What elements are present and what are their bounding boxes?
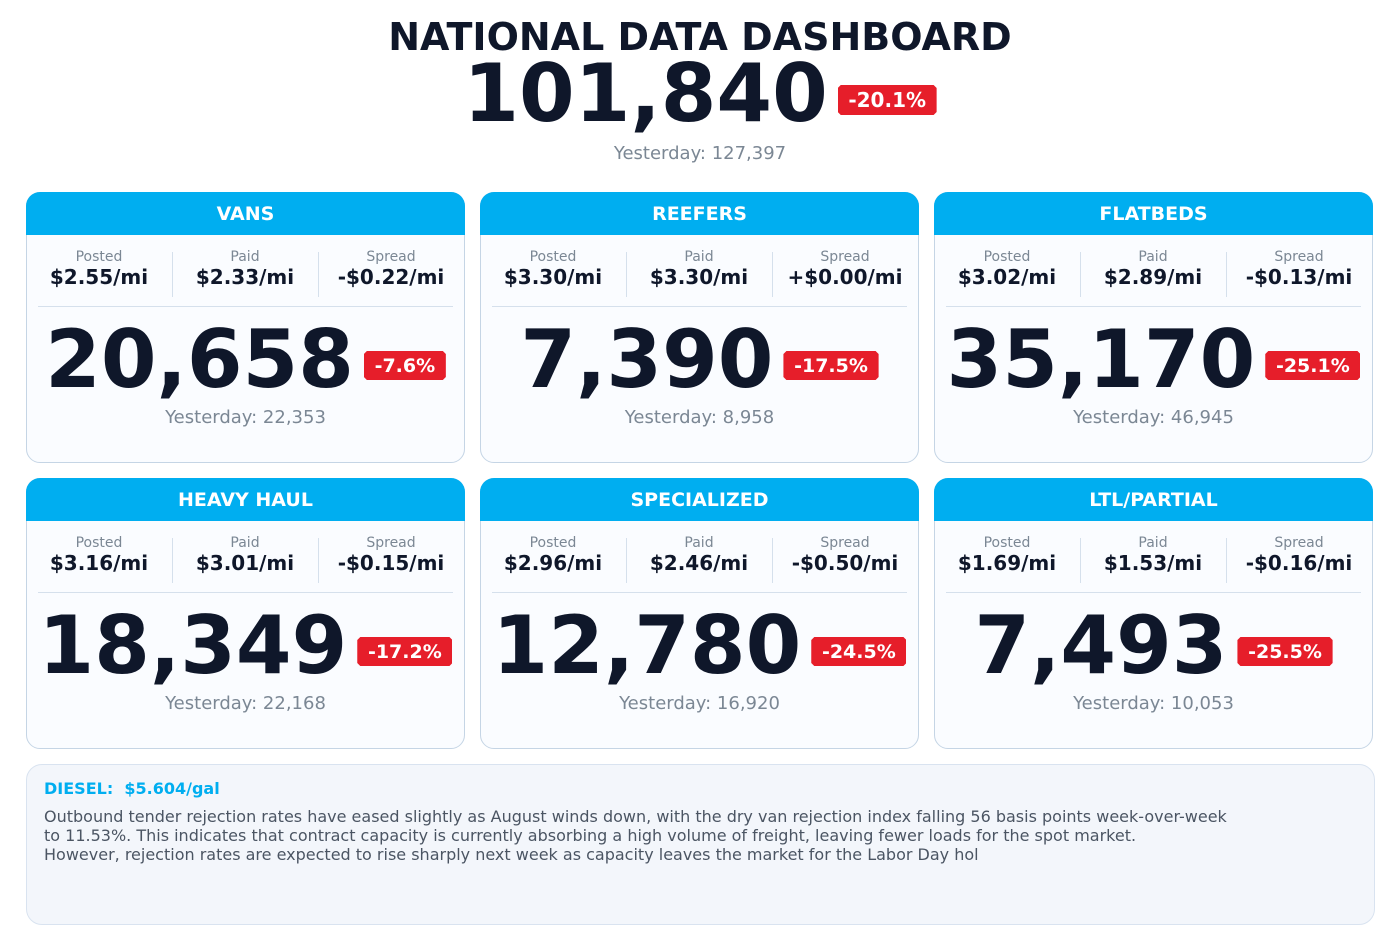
market commentary: Outbound tender rejection rates have eased slightly as August winds down, with the dry van rejection index falling 56 basis points week-over-week to 11.53%. This indicates that contract capacity is currently absorbing a high volume of freight, leaving fewer loads for the spot market. However, rejection rates are expected to rise sharply next week as capacity leaves the market for the Labor Day hol xyxy=(44,807,1227,864)
specialized yesterday: Yesterday: 16,920 xyxy=(619,693,780,714)
reefers paid rate xyxy=(650,249,748,289)
flatbeds paid rate: Paid xyxy=(1138,249,1168,265)
ltl/partial yesterday: Yesterday: 10,053 xyxy=(1073,693,1234,714)
national total with change badge: 101,840 xyxy=(463,47,828,140)
vans paid rate: $2.33/mi xyxy=(196,265,294,289)
panel: reefers xyxy=(480,192,919,463)
ltl/partial count and badge: 7,493 xyxy=(974,599,1227,692)
flatbeds posted rate xyxy=(958,249,1056,289)
ltl/partial count and badge: -25.5% xyxy=(1248,641,1322,663)
flatbeds paid rate xyxy=(1104,249,1202,289)
heavy haul paid rate xyxy=(196,535,294,575)
specialized paid rate: $2.46/mi xyxy=(650,551,748,575)
panel: ltl/partial xyxy=(934,478,1373,749)
heavy haul count and badge: 18,349 xyxy=(39,599,347,692)
specialized posted rate: Posted xyxy=(530,535,576,551)
ltl/partial spread xyxy=(1246,535,1352,575)
specialized heading: SPECIALIZED xyxy=(630,489,768,511)
heavy haul posted rate xyxy=(50,535,148,575)
flatbeds count and badge: 35,170 xyxy=(947,313,1255,406)
reefers paid rate: $3.30/mi xyxy=(650,265,748,289)
reefers heading xyxy=(480,192,919,235)
reefers posted rate: $3.30/mi xyxy=(504,265,602,289)
flatbeds spread xyxy=(1246,249,1352,289)
specialized spread xyxy=(792,535,898,575)
specialized paid rate xyxy=(650,535,748,575)
vans paid rate: Paid xyxy=(230,249,260,265)
ltl/partial posted rate: $1.69/mi xyxy=(958,551,1056,575)
vans heading xyxy=(26,192,465,235)
flatbeds spread: -$0.13/mi xyxy=(1246,265,1352,289)
ltl/partial heading: LTL/PARTIAL xyxy=(1089,489,1218,511)
heavy haul posted rate: Posted xyxy=(76,535,122,551)
reefers posted rate: Posted xyxy=(530,249,576,265)
specialized paid rate: Paid xyxy=(684,535,714,551)
heavy haul spread: Spread xyxy=(366,535,416,551)
reefers spread xyxy=(787,249,903,289)
reefers paid rate: Paid xyxy=(684,249,714,265)
heavy haul heading: HEAVY HAUL xyxy=(178,489,313,511)
flatbeds posted rate: Posted xyxy=(984,249,1030,265)
heavy haul heading xyxy=(26,478,465,521)
panel: heavy haul xyxy=(26,478,465,749)
specialized heading xyxy=(480,478,919,521)
heavy haul count and badge: -17.2% xyxy=(368,641,442,663)
flatbeds yesterday: Yesterday: 46,945 xyxy=(1073,407,1234,428)
flatbeds spread: Spread xyxy=(1274,249,1324,265)
ltl/partial heading xyxy=(934,478,1373,521)
vans count and badge: 20,658 xyxy=(45,313,354,406)
reefers spread: Spread xyxy=(820,249,870,265)
ltl/partial paid rate: Paid xyxy=(1138,535,1168,551)
reefers count and badge: -17.5% xyxy=(794,355,868,377)
vans posted rate: $2.55/mi xyxy=(50,265,148,289)
heavy haul spread: -$0.15/mi xyxy=(338,551,444,575)
flatbeds heading: FLATBEDS xyxy=(1099,203,1208,225)
heavy haul yesterday: Yesterday: 22,168 xyxy=(165,693,326,714)
vans posted rate xyxy=(50,249,148,289)
reefers heading: REEFERS xyxy=(652,203,747,225)
reefers posted rate xyxy=(504,249,602,289)
national total with change badge: -20.1% xyxy=(848,88,926,112)
reefers spread: +$0.00/mi xyxy=(787,265,903,289)
panel: flatbeds xyxy=(934,192,1373,463)
ltl/partial spread: Spread xyxy=(1274,535,1324,551)
specialized spread: -$0.50/mi xyxy=(792,551,898,575)
specialized count and badge: 12,780 xyxy=(493,599,801,692)
ltl/partial posted rate: Posted xyxy=(984,535,1030,551)
flatbeds heading xyxy=(934,192,1373,235)
ltl/partial posted rate xyxy=(958,535,1056,575)
specialized posted rate: $2.96/mi xyxy=(504,551,602,575)
heavy haul paid rate: Paid xyxy=(230,535,260,551)
vans spread: -$0.22/mi xyxy=(338,265,444,289)
vans count and badge: -7.6% xyxy=(375,355,435,377)
ltl/partial spread: -$0.16/mi xyxy=(1246,551,1352,575)
reefers count and badge: 7,390 xyxy=(520,313,773,406)
panel: vans xyxy=(26,192,465,463)
vans yesterday: Yesterday: 22,353 xyxy=(165,407,326,428)
title: NATIONAL DATA DASHBOARD xyxy=(388,15,1012,59)
flatbeds posted rate: $3.02/mi xyxy=(958,265,1056,289)
flatbeds paid rate: $2.89/mi xyxy=(1104,265,1202,289)
heavy haul posted rate: $3.16/mi xyxy=(50,551,148,575)
reefers yesterday: Yesterday: 8,958 xyxy=(625,407,774,428)
vans posted rate: Posted xyxy=(76,249,122,265)
ltl/partial paid rate: $1.53/mi xyxy=(1104,551,1202,575)
vans paid rate xyxy=(196,249,294,289)
vans spread: Spread xyxy=(366,249,416,265)
specialized posted rate xyxy=(504,535,602,575)
panel: specialized xyxy=(480,478,919,749)
ltl/partial paid rate xyxy=(1104,535,1202,575)
specialized spread: Spread xyxy=(820,535,870,551)
national yesterday value: Yesterday: 127,397 xyxy=(614,143,786,164)
heavy haul spread xyxy=(338,535,444,575)
vans spread xyxy=(338,249,444,289)
specialized count and badge: -24.5% xyxy=(822,641,896,663)
heavy haul paid rate: $3.01/mi xyxy=(196,551,294,575)
flatbeds count and badge: -25.1% xyxy=(1276,355,1350,377)
panel: diesel and commentary xyxy=(26,764,1375,925)
diesel price: DIESEL: $5.604/gal xyxy=(44,779,220,798)
vans heading: VANS xyxy=(217,203,274,225)
